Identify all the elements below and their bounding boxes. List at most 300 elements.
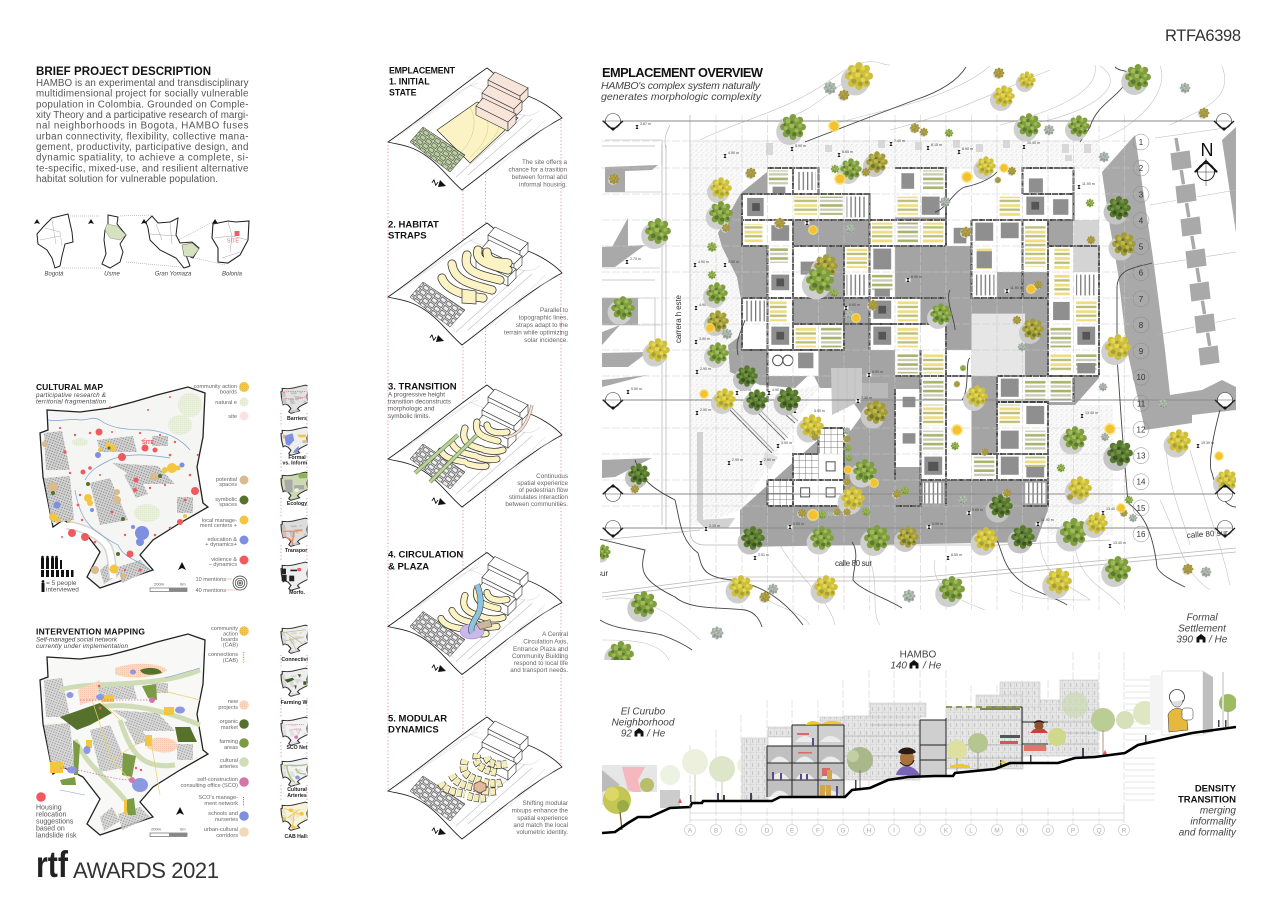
street labels: calle 80 sur xyxy=(835,559,872,568)
density label: El Curubo: Neighborhood xyxy=(612,718,675,728)
axis letters A-R: B xyxy=(714,828,718,834)
caption 5: Shifting modular xyxy=(522,800,568,807)
axis letters A-R: D xyxy=(765,828,770,834)
legend: intervention mapping: ment network xyxy=(204,801,238,807)
height markers: 10.40 m xyxy=(1027,141,1040,145)
height markers: 4.90 m xyxy=(772,388,783,392)
main section block xyxy=(767,721,844,797)
axis letters A-R: K xyxy=(944,828,949,834)
caption 2 xyxy=(504,307,568,344)
heading: habitat straps: 2. HABITAT xyxy=(388,220,439,230)
map: Bolonia xyxy=(212,221,249,278)
height markers: 2.70 m xyxy=(630,257,641,261)
street labels: sur xyxy=(597,569,608,578)
legend: cultural map xyxy=(193,382,249,568)
panel: brief project description xyxy=(36,66,249,185)
building walls xyxy=(742,168,1099,506)
legend: intervention mapping: farming xyxy=(219,739,238,745)
height markers: 4.90 m xyxy=(728,151,739,155)
axis letters A-R: A xyxy=(688,828,693,834)
thumbnails: cultural map layers xyxy=(280,384,308,594)
caption 5: and match the local xyxy=(513,822,568,829)
axis numbers 1-16 xyxy=(1133,134,1149,542)
panel: emplacement diagrams xyxy=(388,66,568,839)
trees xyxy=(593,62,1238,672)
heading: emplacement overview: EMPLACEMENT OVERVIEW xyxy=(602,65,764,80)
height markers: 11.90 m xyxy=(1082,182,1095,186)
height markers: 2.90 m xyxy=(732,458,743,462)
height markers: 13.40 m xyxy=(1106,507,1119,511)
thumbnail: barriers xyxy=(281,385,309,422)
density transition text: informality xyxy=(1190,816,1237,828)
icon: north arrow xyxy=(430,663,446,672)
density transition text: DENSITY xyxy=(1195,784,1237,794)
legend: cultural map: community action xyxy=(193,384,237,390)
subtitle: emplacement overview: generates morphologic complexity xyxy=(601,91,762,103)
thumbnail: formal vs informal: Formal xyxy=(288,455,306,461)
caption 3: of pedestrian flow xyxy=(519,487,568,494)
locator maps xyxy=(34,214,249,278)
height markers: 3.90 m xyxy=(699,337,710,341)
map: intervention mapping xyxy=(40,634,208,835)
height markers: 6.90 m xyxy=(849,303,860,307)
caption 4 xyxy=(510,631,568,674)
heading: circulation and plaza: & PLAZA xyxy=(388,562,429,572)
legend: cultural map: local manage- xyxy=(202,518,237,524)
heading: cultural map: CULTURAL MAP xyxy=(36,382,103,392)
body text: urban connectivity, flexibility, collective mana- xyxy=(36,131,248,142)
body text xyxy=(36,78,249,185)
caption 5: volumetric identity. xyxy=(516,829,568,836)
body text: population in Colombia. Grounded on Comple- xyxy=(36,99,248,110)
body text: te-specific, mixed-use, and resilient alternative xyxy=(36,163,249,174)
caption 4: respond to local life xyxy=(514,660,568,667)
density label: HAMBO: 140 xyxy=(890,660,907,672)
map: Bolonia: SITE xyxy=(227,238,239,244)
heading: circulation and plaza xyxy=(388,550,463,572)
thumbnail: cultural arteries: Cultural xyxy=(287,787,307,793)
people xyxy=(678,720,1226,803)
central pale building xyxy=(831,368,888,415)
heading: modular dynamics xyxy=(388,714,447,736)
legend: cultural map: education & xyxy=(207,537,237,543)
height markers: 7.40 m xyxy=(861,396,872,400)
axis letters A-R: E xyxy=(790,828,795,834)
axis letters A-R: F xyxy=(816,828,820,834)
thumbnail: SCO net: SCO Net xyxy=(286,745,308,751)
legend: cultural map: boards xyxy=(220,390,237,396)
axis numbers 1-16: 10 xyxy=(1137,373,1146,382)
density label: El Curubo: 92 xyxy=(621,728,632,740)
height markers: 4.90 m xyxy=(698,260,709,264)
body text: HAMBO is an experimental and transdisciplinary xyxy=(36,78,249,89)
axis numbers 1-16: 9 xyxy=(1139,347,1144,356)
density label: El Curubo: / He xyxy=(646,728,666,740)
axis numbers 1-16: 8 xyxy=(1139,321,1144,330)
caption 1 xyxy=(509,159,567,188)
caption 2: straps adapt to the xyxy=(516,322,568,329)
density label: Formal Settlement: Settlement xyxy=(1178,624,1227,634)
heading: emplacement overview xyxy=(601,65,764,103)
panel: cultural map xyxy=(35,382,249,594)
legend: cultural map: spaces xyxy=(219,502,237,508)
subtitle: intervention mapping: Self-managed social network xyxy=(36,636,118,644)
height markers: 8.90 m xyxy=(872,370,883,374)
density label: HAMBO: / He xyxy=(922,660,942,672)
diagram 5: modular dynamics xyxy=(388,714,568,839)
body text: habitat solution for vulnerable population. xyxy=(36,174,218,185)
transition intro text: symbolic limits. xyxy=(388,413,431,420)
axis letters A-R: N xyxy=(1020,828,1025,834)
legend: cultural map: natural e xyxy=(215,400,237,406)
trees in section xyxy=(847,690,1237,790)
legend: intervention mapping: organic xyxy=(220,719,238,725)
grid and section lines xyxy=(602,115,1225,610)
thumbnail: farming web: Farming Web xyxy=(281,700,313,706)
caption 2: solar incidence. xyxy=(524,337,568,344)
density label: El Curubo xyxy=(612,706,675,740)
axis numbers 1-16: 5 xyxy=(1139,242,1144,252)
thumbnails: intervention layers xyxy=(280,624,308,838)
plaza steps xyxy=(697,405,798,528)
density label: Formal Settlement: 390 xyxy=(1176,634,1193,646)
legend: intervention mapping: SCO's manage- xyxy=(198,795,238,801)
mentions scale: 40 mentions xyxy=(196,588,226,594)
legend: intervention mapping: connections xyxy=(208,652,238,658)
map: Gran Yomaza: Gran Yomaza xyxy=(155,272,192,278)
legend: intervention mapping: boards xyxy=(221,637,238,643)
height markers: 0.00 m xyxy=(631,387,642,391)
axis letters A-R: I xyxy=(893,828,895,834)
figure: old man mural xyxy=(1168,690,1193,732)
caption 3 xyxy=(505,473,568,508)
legend: intervention mapping: consulting office (SCO) xyxy=(181,783,238,789)
legend: cultural map: ment centers + xyxy=(200,523,237,529)
height markers: 3.90 m xyxy=(781,441,792,445)
icon: north arrow xyxy=(428,333,444,342)
axis letters A-R: R xyxy=(1122,828,1127,834)
axis numbers 1-16: 6 xyxy=(1139,269,1144,278)
legend: intervention mapping: projects xyxy=(218,705,238,711)
pale facades xyxy=(742,680,1098,800)
thumbnail: connectivity: Connectivity xyxy=(281,657,313,663)
caption 1: informal housing. xyxy=(519,182,567,188)
thumbnail: transport: Transport xyxy=(285,548,309,554)
caption 2: Parallel to xyxy=(540,307,568,314)
caption 4: Community Building xyxy=(512,653,568,660)
height markers: 19.39 m xyxy=(1201,441,1214,445)
axis numbers 1-16: 7 xyxy=(1139,295,1144,304)
icon: north arrow xyxy=(430,496,446,505)
legend: intervention mapping: schools and xyxy=(208,811,238,817)
tree left xyxy=(603,778,654,830)
transition intro text: morphologic and xyxy=(388,406,435,412)
pale squares xyxy=(766,140,1091,161)
heading: transition: 3. TRANSITION xyxy=(388,382,457,392)
ground line xyxy=(602,727,1236,833)
mural wall left xyxy=(602,765,680,824)
density label: HAMBO xyxy=(890,650,942,672)
axis letters A-R: H xyxy=(867,828,872,834)
callout: housing relocation: landslide risk xyxy=(36,832,77,840)
legend: intervention mapping: (CAB) xyxy=(223,642,238,648)
height markers: 2.90 m xyxy=(700,408,711,412)
scale bar and north arrow: 200m xyxy=(154,582,165,586)
thumbnail: farming web xyxy=(280,668,308,705)
dotted alignment lines xyxy=(388,120,561,836)
map: cultural map: SITE xyxy=(142,440,155,446)
icon: people interviewed: = 5 people xyxy=(46,580,77,587)
thumbnail: morphology: Morfo. xyxy=(289,590,305,596)
subtitle: cultural map xyxy=(35,392,106,406)
axis letters A-R: O xyxy=(1045,828,1051,834)
axis letters A-R: Q xyxy=(1096,828,1102,834)
axis letters A-R: G xyxy=(840,828,846,834)
heading: emplacement 1 xyxy=(389,66,456,98)
axis numbers 1-16: 13 xyxy=(1137,452,1146,461)
scale bar and north arrow: 200m xyxy=(151,826,162,832)
reference code: RTFA6398 xyxy=(1165,27,1241,45)
height markers: 8.90 m xyxy=(911,275,922,279)
heading: circulation and plaza: 4. CIRCULATION xyxy=(388,550,463,560)
scale bar and north arrow: 0m xyxy=(180,826,186,832)
caption 3: spatial experience xyxy=(517,480,568,487)
axis numbers 1-16: 11 xyxy=(1137,399,1146,408)
transition intro text: A progressive height xyxy=(388,392,445,398)
caption 2: topographic lines, xyxy=(519,314,568,322)
thumbnail: morphology xyxy=(281,562,309,596)
caption 5: mixups enhance the xyxy=(512,808,568,814)
height markers: 2.15 m xyxy=(709,524,720,528)
mentions scale xyxy=(196,576,247,594)
thumbnail: ecology xyxy=(281,472,309,507)
legend: intervention mapping: new xyxy=(228,699,239,705)
legend: intervention mapping xyxy=(181,626,249,839)
height markers: 2.51 m xyxy=(758,553,769,557)
callout: housing relocation: based on xyxy=(36,826,65,832)
heading: emplacement 1: 1. INITIAL xyxy=(389,76,430,86)
caption 4: Entrance Plaza and xyxy=(513,646,568,653)
hatching right xyxy=(1125,680,1155,800)
logo: rtf awards 2021 xyxy=(36,844,219,885)
contour lines xyxy=(602,62,1230,662)
legend: cultural map: spaces xyxy=(219,482,237,488)
height markers: 9.65 m xyxy=(972,508,983,512)
diagram 1: initial state xyxy=(388,66,567,190)
orange markers xyxy=(699,120,1224,521)
body text: dynamic spatiality, to achieve a complete, si- xyxy=(36,153,248,164)
road lines xyxy=(602,115,1236,597)
body text: multidimensional project for socially vulnerable xyxy=(36,89,249,100)
transition intro text xyxy=(388,392,451,420)
right side gray strip and houses xyxy=(1102,127,1236,430)
legend: cultural map: violence & xyxy=(211,557,237,563)
density label: El Curubo: El Curubo xyxy=(621,706,666,718)
caption 5 xyxy=(512,800,568,836)
right building xyxy=(1150,671,1224,735)
caption 1: between formal and xyxy=(512,174,567,181)
heading: habitat straps: STRAPS xyxy=(388,230,427,242)
icon: north compass xyxy=(1194,140,1218,186)
density label: Formal Settlement xyxy=(1176,612,1228,646)
community building fixtures xyxy=(773,355,835,497)
height markers: 13.40 m xyxy=(1085,411,1098,415)
axis numbers 1-16: 4 xyxy=(1139,216,1144,225)
street labels: carrera h este xyxy=(674,294,683,343)
caption 4: and transport needs. xyxy=(510,667,568,674)
height markers: 3.87 m xyxy=(640,122,651,126)
scale bar and north arrow: 0m xyxy=(180,582,186,586)
height markers: 11.90 m xyxy=(1041,518,1054,522)
courtyards, housing modules and walkways xyxy=(742,168,1099,506)
stripes xyxy=(769,171,788,186)
section drawing xyxy=(602,652,1237,836)
icon: north arrow xyxy=(430,826,446,835)
heading: habitat straps xyxy=(388,220,439,242)
legend: intervention mapping: market xyxy=(221,725,238,731)
height markers: 13.40 m xyxy=(1113,541,1126,545)
body text: gement, productivity, participative design, and xyxy=(36,142,248,153)
map: Usme xyxy=(102,215,126,278)
building mass gray ground xyxy=(718,168,1099,547)
caption 1: The site offers a xyxy=(522,159,567,166)
legend: intervention mapping: (CAB) xyxy=(223,658,238,664)
height markers: 3.90 m xyxy=(793,522,804,526)
height markers: 4.90 m xyxy=(699,303,710,307)
body text: xity Theory and a participative research of margi- xyxy=(36,110,248,121)
thumbnail: cultural arteries xyxy=(281,758,309,799)
stairs xyxy=(796,172,816,190)
legend: cultural map: site xyxy=(228,414,237,420)
site plan xyxy=(593,62,1238,672)
thumbnail: ecology: Ecology xyxy=(287,501,307,507)
street labels: calle 80 sur xyxy=(1187,528,1228,540)
legend: intervention mapping: urban-cultural xyxy=(204,827,238,833)
map: Bolonia: Bolonia xyxy=(222,272,243,278)
legend: cultural map: symbolic xyxy=(215,497,237,503)
thumbnail: SCO net xyxy=(281,717,309,751)
thumbnail: barriers: Barriers xyxy=(287,416,307,422)
caption 3: between communities. xyxy=(505,501,568,508)
legend: intervention mapping: self-construction xyxy=(197,777,238,783)
thumbnail: CAB halls xyxy=(281,802,310,840)
height markers: 11.90 m xyxy=(1010,286,1023,290)
density transition text: and formality xyxy=(1179,828,1237,838)
axis numbers 1-16: 3 xyxy=(1139,190,1144,199)
height markers: 8.90 m xyxy=(932,522,943,526)
subtitle: emplacement overview xyxy=(601,80,762,103)
subtitle: intervention mapping xyxy=(36,636,128,650)
legend: intervention mapping: corridors xyxy=(216,833,238,839)
height markers xyxy=(625,122,1214,560)
thumbnail: formal vs informal: vs. Informal xyxy=(282,460,312,466)
height markers: 5.90 m xyxy=(814,409,825,413)
logo: rtf awards 2021: AWARDS 2021 xyxy=(73,858,219,883)
legend: cultural map: + dynamics+ xyxy=(205,542,237,548)
legend: intervention mapping: community xyxy=(211,626,238,632)
caption 3: Continuous xyxy=(536,473,568,480)
subtitle: emplacement overview: HAMBO's complex system naturally xyxy=(601,80,761,92)
diagram 4: circulation and plaza xyxy=(388,550,568,674)
legend: cultural map: potential xyxy=(216,477,237,483)
scale bar and north arrow xyxy=(150,562,187,592)
axis letters A-R: P xyxy=(1071,828,1075,834)
axis letters A-R xyxy=(684,824,1130,836)
density label: Formal Settlement: Formal xyxy=(1186,612,1218,624)
subtitle: cultural map: participative research & xyxy=(35,392,106,399)
height markers: 7.40 m xyxy=(894,139,905,143)
north arrows xyxy=(34,219,218,224)
callout: housing relocation: relocation xyxy=(36,812,66,818)
density label: Formal Settlement: / He xyxy=(1208,634,1228,646)
callout: housing relocation: Housing xyxy=(36,804,62,812)
axis numbers 1-16: 15 xyxy=(1137,504,1146,513)
mural faces xyxy=(896,721,1048,776)
heading: emplacement 1: STATE xyxy=(389,88,417,98)
legend: intervention mapping: areas xyxy=(224,745,238,751)
map: Gran Yomaza xyxy=(146,216,199,278)
axis numbers 1-16: 12 xyxy=(1137,425,1146,434)
height markers: 2.90 m xyxy=(764,458,775,462)
legend: cultural map: – dynamics xyxy=(209,562,237,568)
diagram 3: transition xyxy=(388,382,568,508)
diagram 2: habitat straps xyxy=(388,220,568,345)
map: Bogotá xyxy=(37,214,73,278)
thumbnail: transport xyxy=(281,518,309,554)
subtitle: intervention mapping: currently under implementation xyxy=(36,643,128,650)
pale trees and background xyxy=(660,749,742,805)
legend: intervention mapping: nurseries xyxy=(215,817,238,823)
thumbnail: connectivity xyxy=(280,624,308,661)
axis numbers 1-16: 1 xyxy=(1139,138,1144,147)
height markers: 8.55 m xyxy=(951,553,962,557)
axis letters A-R: L xyxy=(969,828,973,834)
transition intro text: transition deconstructs xyxy=(388,398,451,406)
axis letters A-R: C xyxy=(739,828,744,834)
thumbnail: CAB halls: CAB Halls xyxy=(284,834,310,840)
callout: housing relocation xyxy=(36,792,77,840)
caption 1: chance for a trasition xyxy=(509,166,567,174)
height markers: 8.15 m xyxy=(931,143,942,147)
middle section block xyxy=(920,707,1048,776)
adjacent buildings left xyxy=(602,140,662,478)
section markers xyxy=(603,114,1235,537)
caption 2: terrain while optimizing xyxy=(504,330,568,336)
icon: people interviewed: interviewed xyxy=(46,586,79,594)
section grid lines xyxy=(690,652,1124,810)
height markers: 2.90 m xyxy=(700,367,711,371)
subtitle: cultural map: territorial fragmentation xyxy=(36,398,106,406)
thumbnail: formal vs informal xyxy=(280,426,308,464)
height markers: 5.90 m xyxy=(728,260,739,264)
core modules xyxy=(747,173,1095,477)
scale bar and north arrow xyxy=(150,807,187,836)
legend: intervention mapping: action xyxy=(223,632,238,638)
density label: HAMBO: HAMBO xyxy=(900,650,937,660)
density transition text: merging xyxy=(1200,806,1236,816)
map: cultural map xyxy=(40,387,208,588)
density transition text xyxy=(1178,784,1237,838)
map: Bogotá: Bogotá xyxy=(44,272,64,278)
dark topographic lines xyxy=(595,67,1236,650)
icon: north arrow xyxy=(430,178,446,187)
caption 5: spatial experience xyxy=(517,815,568,822)
axis numbers 1-16: 14 xyxy=(1137,478,1146,487)
caption 4: A Central xyxy=(542,631,568,638)
height markers: 6.65 m xyxy=(842,150,853,154)
logo: rtf awards 2021: rtf xyxy=(36,844,69,885)
heading: brief project description: BRIEF PROJECT DESCRIPTION xyxy=(36,66,211,78)
